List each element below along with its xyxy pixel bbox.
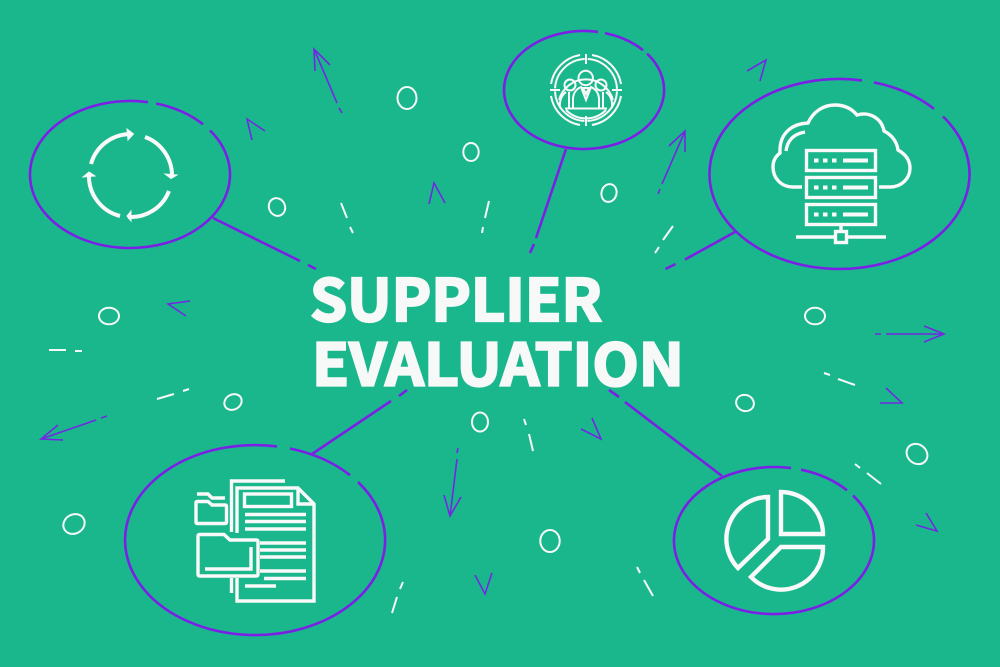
decorative white circles [60, 87, 932, 552]
panel: pie chart ellipse with connector [609, 390, 874, 614]
title [310, 254, 684, 402]
title: EVALUATION [312, 318, 684, 402]
decorative purple arrows [41, 49, 944, 594]
decorative white dashes [49, 201, 881, 613]
icon: cloud server [773, 105, 910, 242]
title: SUPPLIER [310, 254, 602, 338]
icon: cycle arrows [83, 129, 177, 221]
icon: documents and folders [196, 481, 314, 601]
panel: documents ellipse with connector [125, 390, 407, 635]
icon: team in target [550, 54, 622, 126]
panel: cycle ellipse with connector [30, 101, 316, 269]
panel: team ellipse with connector [504, 31, 664, 253]
icon: pie chart [726, 492, 823, 590]
panel: cloud ellipse with connector [666, 79, 969, 269]
